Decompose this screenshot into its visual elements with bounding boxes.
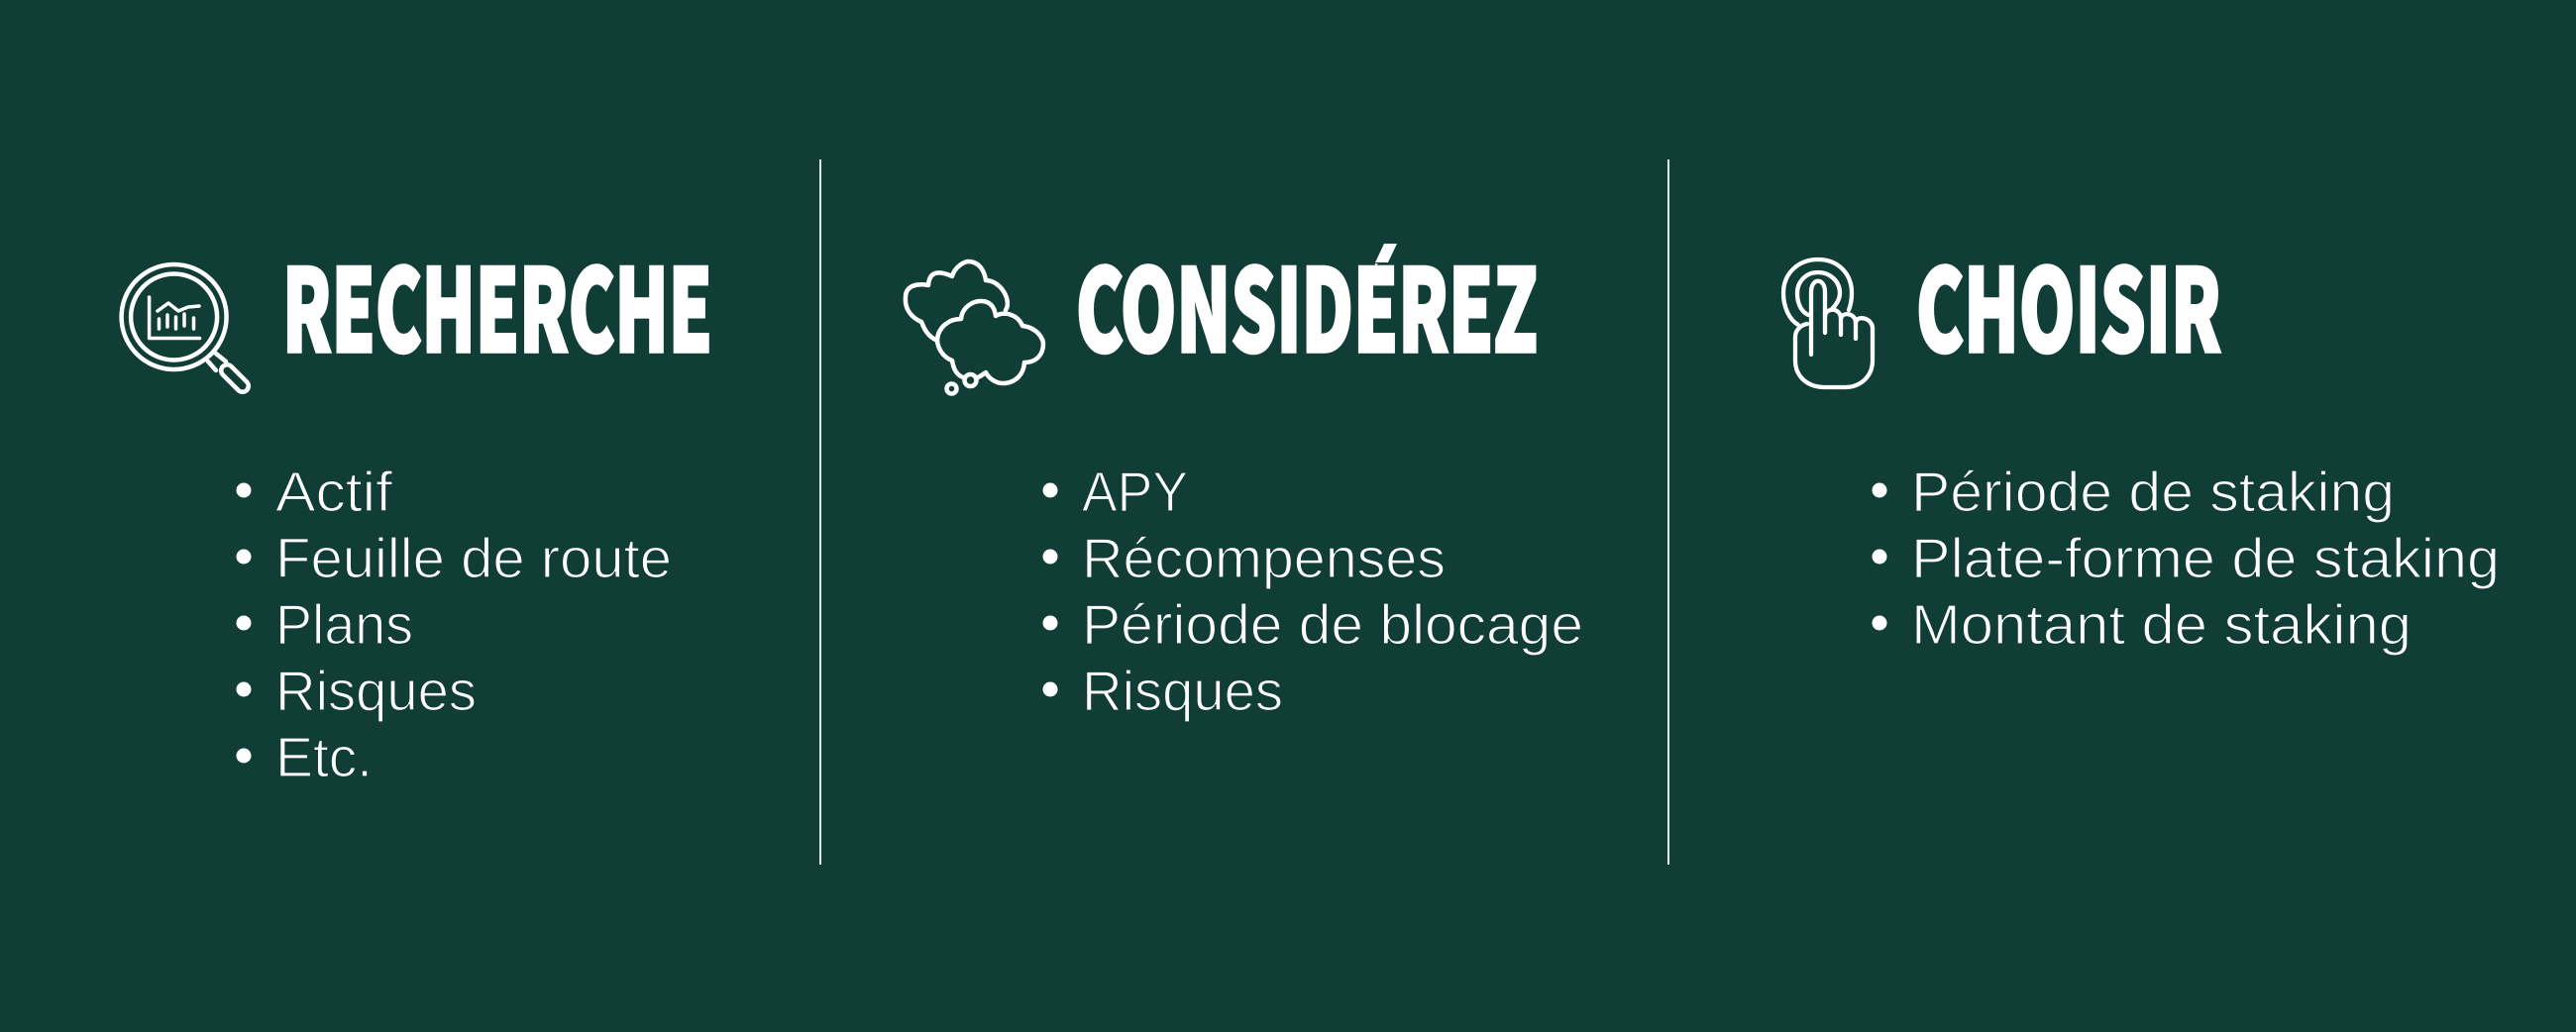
list: considérez items: Récompenses — [1082, 527, 1446, 590]
list: choisir items — [1873, 461, 2500, 657]
list: recherche items: Risques — [275, 660, 477, 723]
panel: considérez — [906, 221, 1583, 723]
panel: recherche — [122, 221, 712, 789]
heading: considérez — [1076, 221, 1538, 385]
list: considérez items: Risques — [1082, 660, 1283, 723]
icon: magnifying glass with chart — [122, 264, 251, 394]
panel: choisir — [1783, 221, 2500, 657]
list: considérez items: Période de blocage — [1082, 593, 1583, 657]
heading: recherche: RECHERCHE — [282, 221, 712, 385]
list: recherche items: Feuille de route — [275, 527, 672, 590]
list: considérez items: APY — [1082, 461, 1188, 524]
heading: considérez: CONSIDÉREZ — [1076, 221, 1538, 385]
list: choisir items: Montant de staking — [1911, 593, 2412, 657]
icon: hand pressing button — [1783, 259, 1873, 387]
heading: choisir: CHOISIR — [1916, 221, 2221, 385]
list: recherche items: Plans — [275, 593, 413, 657]
icon: thought clouds — [906, 261, 1043, 394]
list: recherche items — [236, 461, 672, 789]
list: recherche items: Actif — [275, 461, 392, 524]
list: choisir items: Période de staking — [1911, 461, 2395, 524]
list: choisir items: Plate-forme de staking — [1911, 527, 2500, 590]
list: recherche items: Etc. — [275, 726, 373, 789]
list: considérez items — [1042, 461, 1583, 723]
